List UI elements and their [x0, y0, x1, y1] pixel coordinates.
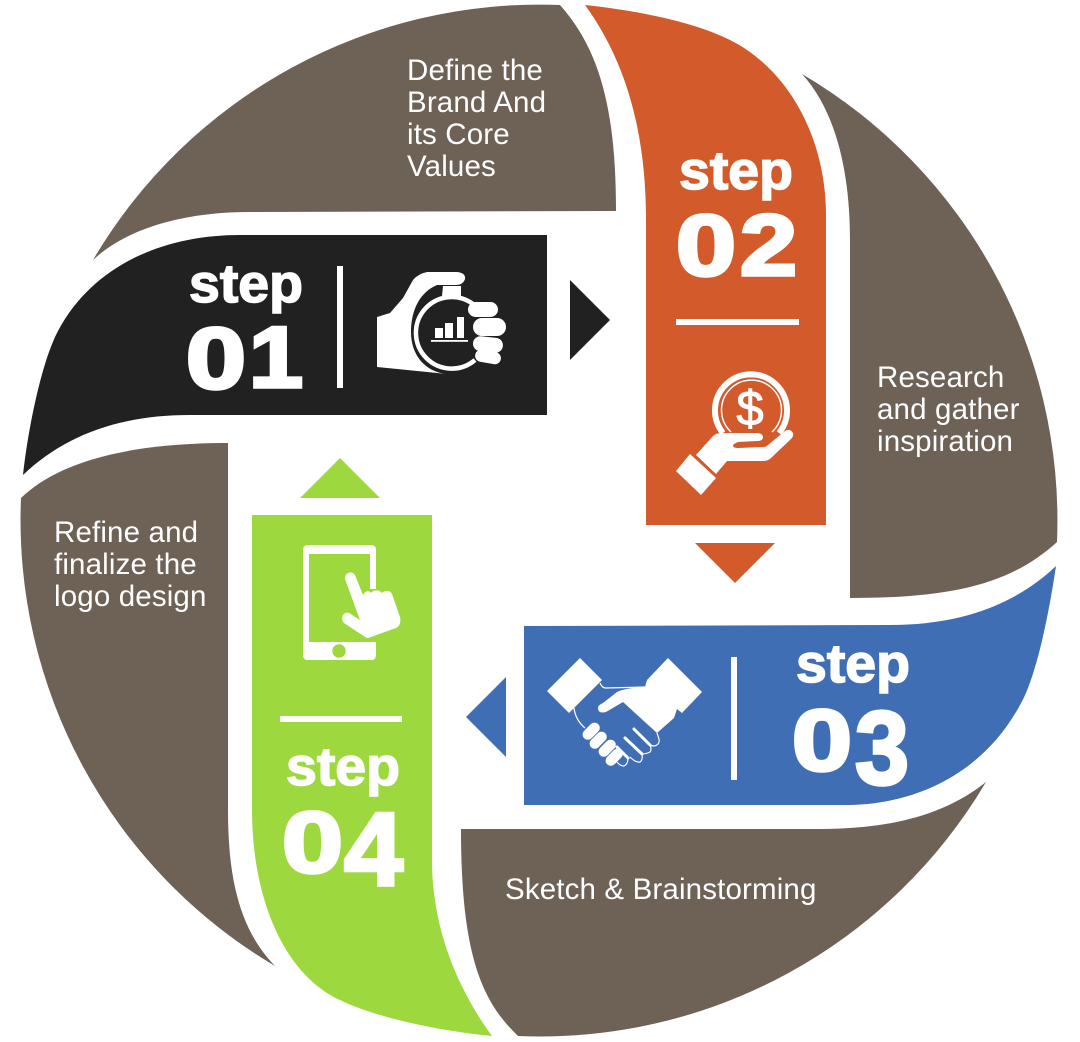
arrow: step 01 to 02: [570, 280, 610, 360]
number: 04: 4: [344, 792, 403, 908]
number: 04: [282, 792, 403, 908]
number: 03: [792, 691, 909, 807]
number: 02: 2: [740, 198, 797, 294]
icon: handshake: [547, 658, 702, 768]
icon: hand holding coin: [676, 374, 793, 495]
text: research and gather: inspiration: [877, 425, 1013, 458]
icon: hand holding coin: $: [736, 382, 764, 436]
text: refine and finalize: logo design: [54, 580, 207, 613]
label: step 01: step: [189, 254, 303, 314]
icon: hand holding stopwatch: [377, 272, 506, 374]
text: define the brand: Values: [407, 150, 496, 183]
label: step 02: step: [679, 141, 793, 201]
text: refine and finalize: finalize the: [54, 548, 197, 581]
number: 01: 0: [186, 311, 246, 407]
number: 02: 0: [676, 198, 736, 294]
panel: step 02: [585, 5, 826, 525]
number: 01: 1: [249, 310, 303, 406]
panel: sketch and brainstorming: [461, 782, 986, 1036]
panel: refine and finalize: [21, 443, 275, 966]
arrow: step 03 to 04: [466, 677, 506, 757]
label: step 03: step: [796, 634, 910, 694]
panel: define the brand: [93, 5, 616, 260]
number: 01: [186, 310, 303, 407]
text: define the brand: its Core: [407, 118, 510, 151]
number: 04: 0: [282, 795, 343, 891]
arrow: step 02 to 03: [695, 543, 775, 583]
label: step 04: step: [286, 737, 400, 797]
panel: research and gather: [802, 74, 1057, 598]
text: refine and finalize: Refine and: [54, 516, 198, 549]
text: sketch and brainstorming: Sketch & Brainstorming: [505, 873, 817, 906]
number: 03: 0: [792, 693, 852, 789]
icon: tablet with pointing hand: [303, 545, 400, 660]
panel: step 04: [252, 515, 492, 1036]
text: research and gather: and gather: [877, 393, 1020, 426]
text: research and gather: Research: [877, 361, 1004, 394]
number: 02: [676, 198, 797, 294]
text: define the brand: Define the: [407, 54, 543, 87]
text: define the brand: Brand And: [407, 86, 546, 119]
number: 03: 3: [855, 691, 909, 807]
panel: step 01: [23, 235, 547, 475]
panel: step 03: [524, 566, 1056, 807]
arrow: step 04 to 01: [300, 458, 380, 498]
